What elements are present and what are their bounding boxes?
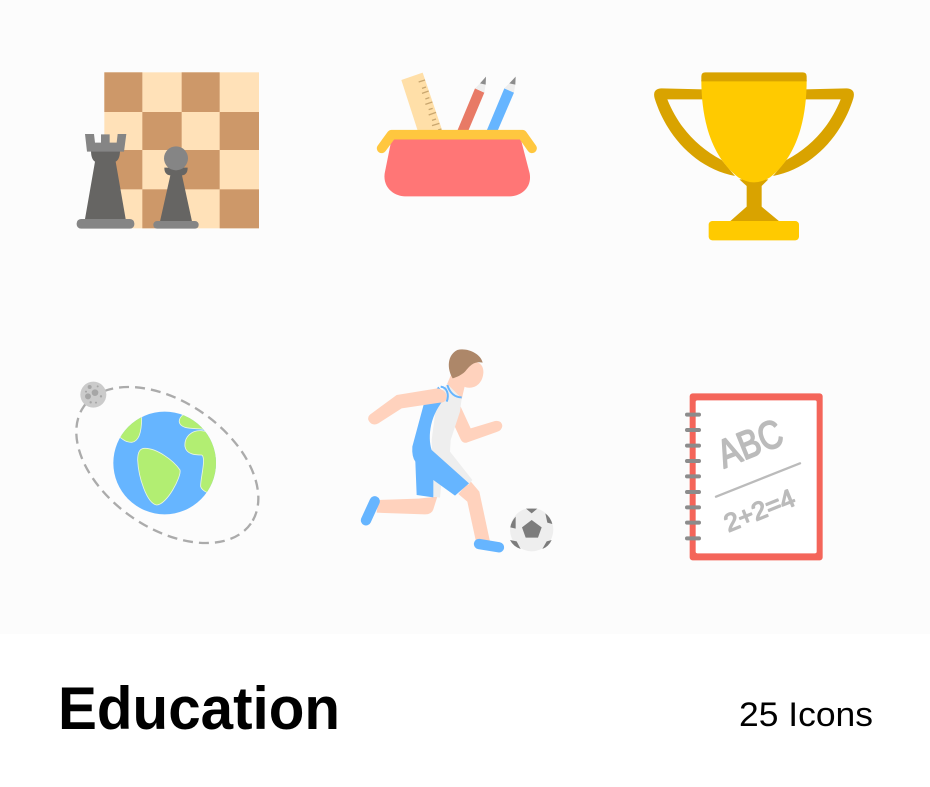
icon: pencil case [382,73,532,196]
icon: spiral notebook [687,393,823,560]
title: Education [58,675,340,742]
ABC handwriting: ABC [711,411,789,477]
shoes [366,501,375,520]
red pencil [457,77,486,131]
ball [510,508,553,551]
collar [441,385,462,402]
front leg [458,481,490,542]
jersey white [432,384,472,498]
rear arm [368,388,447,424]
rear leg [377,497,437,514]
spiral rings [687,415,699,538]
orbit [48,355,287,575]
equation handwriting: 2+2=4 [720,484,799,538]
icon: soccer player [366,349,553,551]
icon: chess board and pieces [77,72,259,229]
infographic canvas [62,72,872,730]
ruler [401,73,443,132]
front arm [453,407,502,443]
icon count: 25 Icons [739,696,873,734]
icon: earth and moon orbit [75,382,260,544]
globe [113,410,223,514]
hair [449,349,483,378]
pawn [153,146,199,229]
moon [80,382,106,408]
icon: trophy [654,72,854,240]
neck and face [447,373,465,399]
blue pencil [487,77,516,131]
jersey blue [412,387,469,497]
rook [77,134,134,229]
